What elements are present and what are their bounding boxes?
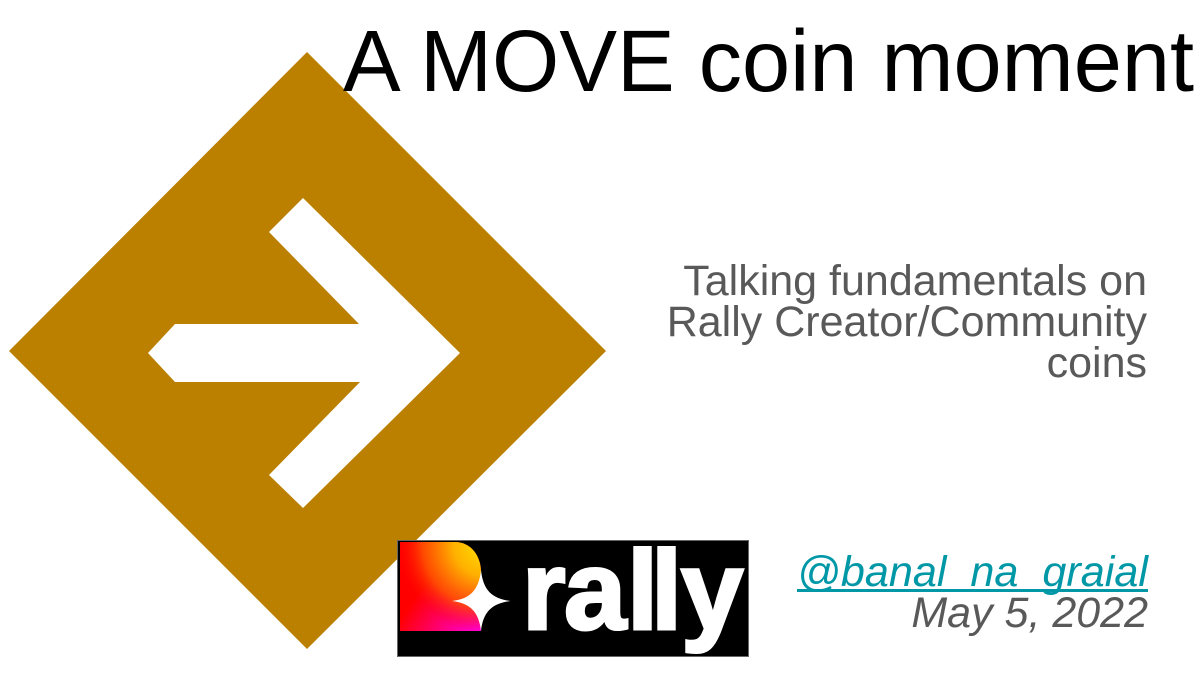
icon: gold diamond with white arrow	[9, 52, 606, 649]
subtitle	[667, 257, 1147, 387]
author handle link: @banal_na_graial	[797, 548, 1149, 596]
subtitle: Talking fundamentals on	[683, 257, 1147, 305]
subtitle: Rally Creator/Community	[667, 298, 1147, 346]
title: A MOVE coin moment	[343, 13, 1194, 110]
logo: rally: rally	[522, 528, 743, 653]
logo: rally	[398, 528, 748, 656]
date: May 5, 2022	[911, 589, 1148, 637]
subtitle: coins	[1047, 339, 1147, 387]
